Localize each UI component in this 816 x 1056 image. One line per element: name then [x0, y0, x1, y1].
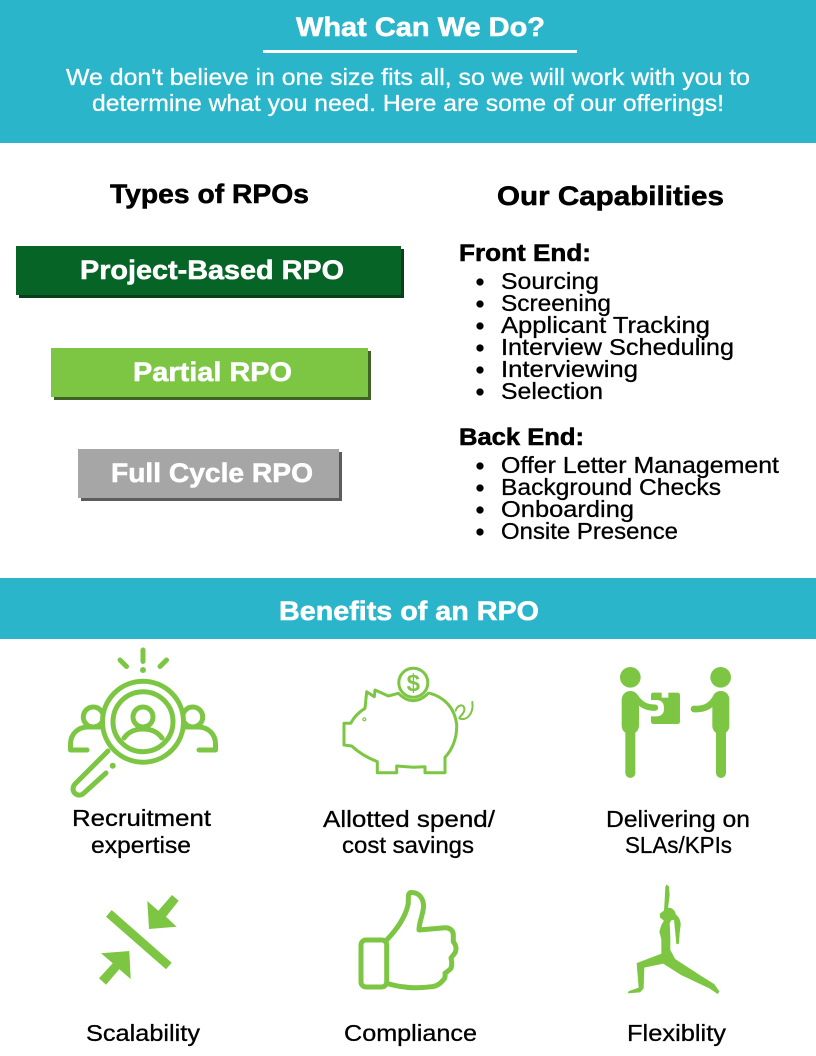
subheading: front end: Front End: [459, 240, 591, 267]
label: compliance: Compliance [344, 1020, 477, 1046]
label: recruitment expertise [72, 805, 212, 858]
heading: benefits of an RPO: Benefits of an RPO [279, 596, 539, 626]
list: front end: Interview Scheduling [501, 334, 734, 360]
button: project-based RPO: Project-Based RPO [80, 255, 344, 285]
label: delivering on SLAs/KPIs [606, 806, 750, 858]
label: delivering on SLAs/KPIs: SLAs/KPIs [625, 832, 732, 858]
icon: scalability arrows [99, 895, 179, 985]
list: back end: Offer Letter Management [501, 452, 780, 478]
list: back end: Background Checks [501, 474, 721, 500]
list: back end: Onboarding [501, 496, 634, 522]
title: What Can We Do? [296, 12, 545, 42]
list: back end [476, 452, 780, 544]
panel: our capabilities [459, 181, 780, 544]
list: front end: Sourcing [501, 268, 599, 294]
button: project-based RPO [16, 246, 404, 298]
icon: people delivering package [620, 667, 731, 778]
heading: our capabilities: Our Capabilities [497, 181, 724, 211]
list: front end [476, 268, 734, 404]
label: delivering on SLAs/KPIs: Delivering on [606, 806, 750, 832]
heading: types of RPOs: Types of RPOs [110, 179, 309, 209]
icon: yoga figure [628, 885, 719, 994]
list: front end: Screening [501, 290, 611, 316]
intro text: We don't believe in one size fits all, so we will work with you to [66, 64, 750, 90]
button: full cycle RPO [78, 449, 342, 501]
list: back end: Onsite Presence [501, 518, 678, 544]
label: allotted spend [323, 806, 496, 858]
icon: piggy bank [344, 668, 473, 773]
intro text: determine what you need. Here are some of our offerings! [92, 90, 724, 116]
button: partial RPO [51, 348, 371, 400]
label: flexiblity: Flexiblity [627, 1020, 727, 1046]
label: allotted spend: Allotted spend/ [323, 806, 496, 832]
list: front end: Applicant Tracking [501, 312, 710, 338]
icon: recruitment magnifier [70, 650, 216, 795]
icon: piggy bank: $ [407, 670, 421, 697]
button: full cycle RPO: Full Cycle RPO [111, 458, 313, 488]
label: recruitment expertise: Recruitment [72, 805, 212, 831]
button: partial RPO: Partial RPO [133, 357, 292, 387]
icon: thumbs up [361, 892, 456, 988]
panel: header band [0, 0, 816, 143]
label: scalability: Scalability [86, 1020, 201, 1046]
label: allotted spend: cost savings [342, 832, 474, 858]
intro text [66, 64, 750, 116]
list: front end: Selection [501, 378, 603, 404]
subheading: back end: Back End: [459, 424, 584, 451]
list: front end: Interviewing [501, 356, 638, 382]
label: recruitment expertise: expertise [91, 832, 191, 858]
panel: benefits band [0, 578, 816, 639]
panel: types of RPOs [16, 179, 404, 501]
